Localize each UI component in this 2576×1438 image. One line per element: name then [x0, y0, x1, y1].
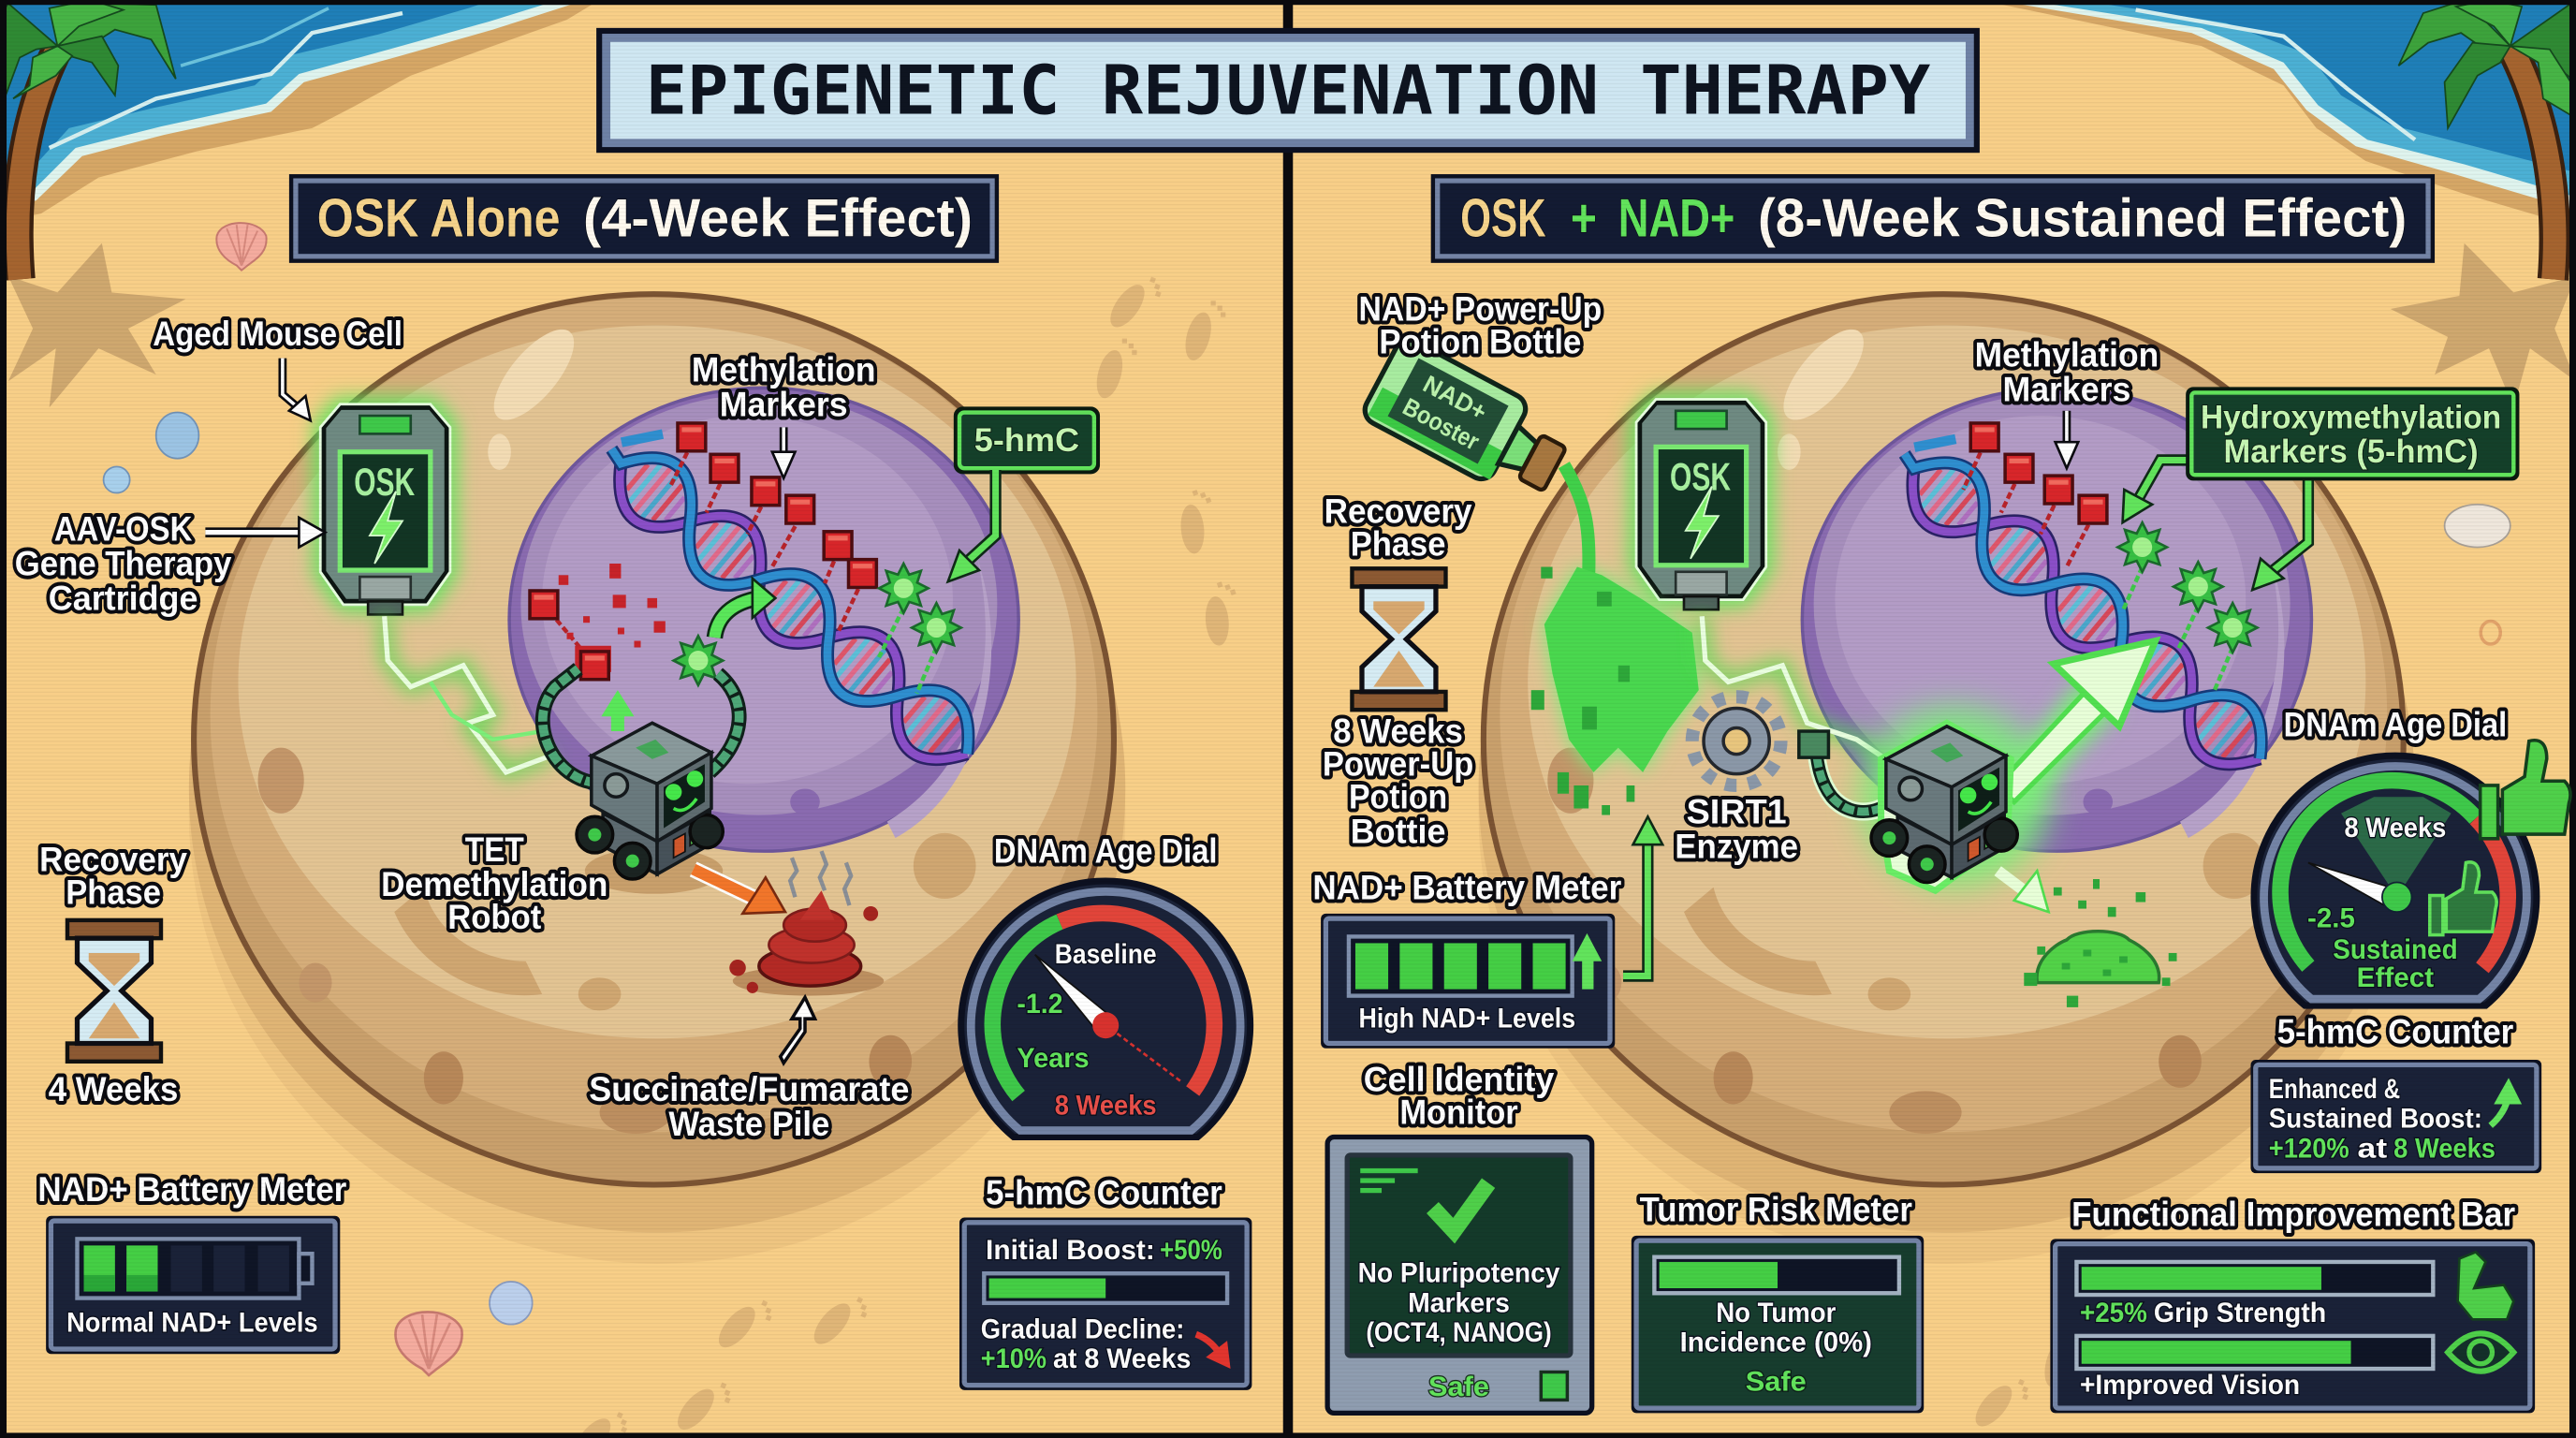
- 5-hmC counter left: +50%: [1160, 1235, 1222, 1266]
- right panel header: NAD+: [1618, 188, 1734, 248]
- aged mouse cell left: [194, 294, 1114, 1184]
- aged mouse cell right: [1484, 294, 2404, 1184]
- waste pile: [729, 851, 884, 996]
- DNAm age dial right: Effect: [2357, 962, 2434, 993]
- label: TET demethylation robot: Demethylation: [381, 865, 607, 903]
- palm tree shadow left: [8, 243, 185, 407]
- recovery phase right: Bottie: [1351, 813, 1445, 851]
- label: AAV-OSK gene therapy cartridge: Cartridge: [49, 579, 198, 617]
- 5-hmC counter right: 5-hmC Counter: [2277, 1013, 2513, 1051]
- hydroxymethylation markers label: Hydroxymethylation: [2201, 399, 2501, 435]
- label: methylation markers right: Methylation: [1975, 336, 2159, 374]
- enzyme glow behind robot: [1860, 707, 2050, 888]
- DNAm age dial right: 8 Weeks: [2345, 813, 2446, 844]
- DNAm age dial left: [961, 832, 1251, 1137]
- OSK cartridge right: OSK: [1670, 454, 1731, 498]
- 5-hmC counter left: [959, 1174, 1251, 1390]
- NAD+ battery meter right: [1312, 868, 1621, 1049]
- 5-hmC counter left: Initial Boost:: [986, 1235, 1155, 1266]
- label: NAD+ power-up potion bottle: Potion Bottle: [1379, 323, 1581, 361]
- palm tree shadow right: [2391, 243, 2576, 407]
- title banner: EPIGENETIC REJUVENATION THERAPY: [646, 51, 1931, 130]
- label: methylation markers left: [692, 350, 875, 478]
- DNAm age dial right: [2254, 706, 2570, 1005]
- arrow to waste pile: [781, 997, 815, 1064]
- right panel header: [1431, 174, 2435, 263]
- nucleus right: [1802, 388, 2311, 851]
- right panel header: OSK: [1460, 188, 1546, 248]
- footprints and shells: right beach: [1967, 505, 2510, 1438]
- hydroxymethylation markers label: [2123, 391, 2515, 590]
- footprints and shells: left beach: [104, 223, 1251, 1438]
- 5-hmC counter left: +10%: [981, 1343, 1046, 1374]
- label: methylation markers left: Markers: [720, 385, 848, 423]
- cell identity monitor: Markers: [1408, 1287, 1510, 1318]
- label: methylation markers right: [1975, 336, 2159, 468]
- TET demethylation robot left: [543, 668, 739, 894]
- NAD+ battery meter left: NAD+ Battery Meter: [37, 1170, 346, 1209]
- DNAm age dial left: DNAm Age Dial: [994, 832, 1218, 871]
- DNA helix right: [1880, 420, 2291, 785]
- electric bolt left: [385, 616, 550, 772]
- palm tree right: [2398, 0, 2576, 279]
- green up arrow from battery: [1623, 816, 1662, 976]
- electric bolt right: [1702, 616, 1906, 772]
- recovery phase left: Recovery: [39, 840, 188, 878]
- green star held by robot: [674, 636, 723, 685]
- 5-hmC label left: 5-hmC: [974, 422, 1079, 459]
- 5-hmC counter right: 8 Weeks: [2393, 1133, 2496, 1164]
- SIRT1 enzyme gear: SIRT1: [1687, 793, 1787, 831]
- orange arrow to waste: [694, 869, 785, 914]
- cell identity monitor: (OCT4, NANOG): [1366, 1317, 1552, 1348]
- recovery phase right: 8 Weeks: [1333, 712, 1463, 751]
- big green activation arrow: [1991, 641, 2156, 815]
- curved conversion arrow: [714, 579, 775, 638]
- central divider: [1283, 0, 1293, 1438]
- methylation markers left: [670, 423, 876, 633]
- OSK cartridge left: OSK: [354, 460, 416, 504]
- functional improvement bar: +Improved Vision: [2080, 1370, 2300, 1401]
- 5-hmC counter left: at 8 Weeks: [1053, 1343, 1191, 1374]
- 5-hmC green stars right: [2117, 522, 2258, 690]
- label: TET demethylation robot: TET: [465, 830, 524, 869]
- 5-hmC counter left: Gradual Decline:: [981, 1313, 1184, 1344]
- label: AAV-OSK gene therapy cartridge: Gene Therapy: [15, 545, 232, 583]
- recovery phase right: Recovery: [1325, 492, 1472, 530]
- 5-hmC counter right: Sustained Boost:: [2269, 1104, 2482, 1135]
- functional improvement bar: Grip Strength: [2154, 1298, 2326, 1328]
- recovery phase right: [1323, 492, 1473, 851]
- 5-hmC counter left: 5-hmC Counter: [986, 1174, 1222, 1212]
- DNA helix left: [586, 415, 999, 780]
- 5-hmC green stars left: [879, 564, 961, 694]
- recovery phase right: Phase: [1351, 524, 1445, 563]
- label: methylation markers right: Markers: [2002, 370, 2130, 408]
- SIRT1 enzyme gear: Enzyme: [1675, 827, 1798, 865]
- label: NAD+ power-up potion bottle: NAD+ Power-Up: [1358, 289, 1602, 328]
- tumor risk meter: Safe: [1746, 1367, 1807, 1398]
- label: AAV-OSK gene therapy cartridge: [15, 510, 326, 617]
- label: TET demethylation robot: [381, 830, 607, 936]
- ocean: top left: [0, 0, 600, 222]
- tumor risk meter: [1632, 1190, 1924, 1413]
- functional improvement bar: +25%: [2080, 1298, 2147, 1328]
- label: methylation markers left: Methylation: [692, 350, 875, 389]
- palm tree left: [0, 0, 176, 279]
- recovery phase left: [39, 840, 188, 1108]
- left panel header: OSK Alone: [317, 188, 560, 248]
- tumor risk meter: No Tumor: [1716, 1298, 1837, 1328]
- nucleus left: [509, 388, 1018, 851]
- DNAm age dial left: Baseline: [1055, 939, 1157, 970]
- cell identity monitor: No Pluripotency: [1358, 1258, 1560, 1289]
- potion stream and green splash: [1531, 465, 1699, 815]
- NAD+ battery meter right: High NAD+ Levels: [1358, 1004, 1575, 1034]
- DNAm age dial left: 8 Weeks: [1055, 1091, 1157, 1122]
- label: TET demethylation robot: Robot: [447, 898, 541, 936]
- 5-hmC counter right: [2250, 1013, 2541, 1173]
- label: succinate fumarate waste pile: Waste Pile: [668, 1105, 829, 1143]
- cell identity monitor: Cell Identity: [1364, 1061, 1555, 1099]
- DNAm age dial left: -1.2: [1017, 989, 1063, 1020]
- right panel header: (8-Week Sustained Effect): [1758, 188, 2407, 248]
- recovery phase right: Power-Up: [1323, 745, 1473, 784]
- cell shadow right: [1479, 345, 2415, 1264]
- potion bottle: [1360, 335, 1577, 508]
- potion bottle: NAD+: [1418, 370, 1491, 426]
- label: AAV-OSK gene therapy cartridge: AAV-OSK: [54, 510, 193, 549]
- DNAm age dial right: Sustained: [2333, 934, 2458, 965]
- cell identity monitor: Safe: [1428, 1372, 1489, 1402]
- cell shadow left: [189, 345, 1125, 1264]
- TET robot right: [1799, 723, 2017, 890]
- 5-hmC label left: [948, 411, 1096, 581]
- 5-hmC counter right: Enhanced &: [2269, 1074, 2400, 1105]
- methylation markers right: [1963, 423, 2107, 567]
- DNAm age dial left: Years: [1017, 1043, 1090, 1074]
- right panel header: +: [1571, 188, 1597, 248]
- SIRT1 enzyme gear: [1675, 697, 1798, 865]
- potion bottle: Booster: [1398, 392, 1484, 456]
- removed methyl groups and red particles: [530, 564, 666, 680]
- 5-hmC counter right: +120%: [2269, 1133, 2349, 1164]
- tumor risk meter: Tumor Risk Meter: [1640, 1190, 1912, 1228]
- ocean: top right: [1980, 0, 2576, 227]
- NAD+ battery meter right: NAD+ Battery Meter: [1312, 868, 1621, 906]
- functional improvement bar: [2050, 1196, 2535, 1413]
- label: succinate fumarate waste pile: Succinate/Fumarate: [589, 1070, 909, 1108]
- title banner: [596, 28, 1980, 153]
- DNAm age dial right: -2.5: [2307, 903, 2355, 934]
- cell identity monitor: Monitor: [1399, 1093, 1518, 1132]
- label: aged mouse cell: [153, 315, 402, 420]
- label: aged mouse cell: Aged Mouse Cell: [153, 315, 402, 353]
- recovery phase left: Phase: [66, 873, 161, 912]
- hydroxymethylation markers label: Markers (5-hmC): [2224, 433, 2479, 470]
- left panel header: [289, 174, 999, 263]
- OSK cartridge right: [1636, 400, 1766, 609]
- green pile and particles: [1998, 871, 2177, 1007]
- OSK cartridge left: [320, 404, 450, 614]
- 5-hmC counter right: at: [2358, 1133, 2387, 1164]
- cell identity monitor: [1327, 1061, 1592, 1413]
- functional improvement bar: Functional Improvement Bar: [2071, 1196, 2515, 1234]
- label: succinate fumarate waste pile: [589, 1070, 909, 1143]
- label: NAD+ power-up potion bottle: [1358, 289, 1602, 361]
- recovery phase right: Potion: [1349, 778, 1447, 816]
- tumor risk meter: Incidence (0%): [1680, 1327, 1872, 1357]
- NAD+ battery meter left: Normal NAD+ Levels: [66, 1307, 318, 1338]
- left panel header: (4-Week Effect): [583, 188, 973, 248]
- NAD+ battery meter left: [37, 1170, 346, 1354]
- recovery phase left: 4 Weeks: [49, 1070, 178, 1108]
- DNAm age dial right: DNAm Age Dial: [2284, 706, 2507, 744]
